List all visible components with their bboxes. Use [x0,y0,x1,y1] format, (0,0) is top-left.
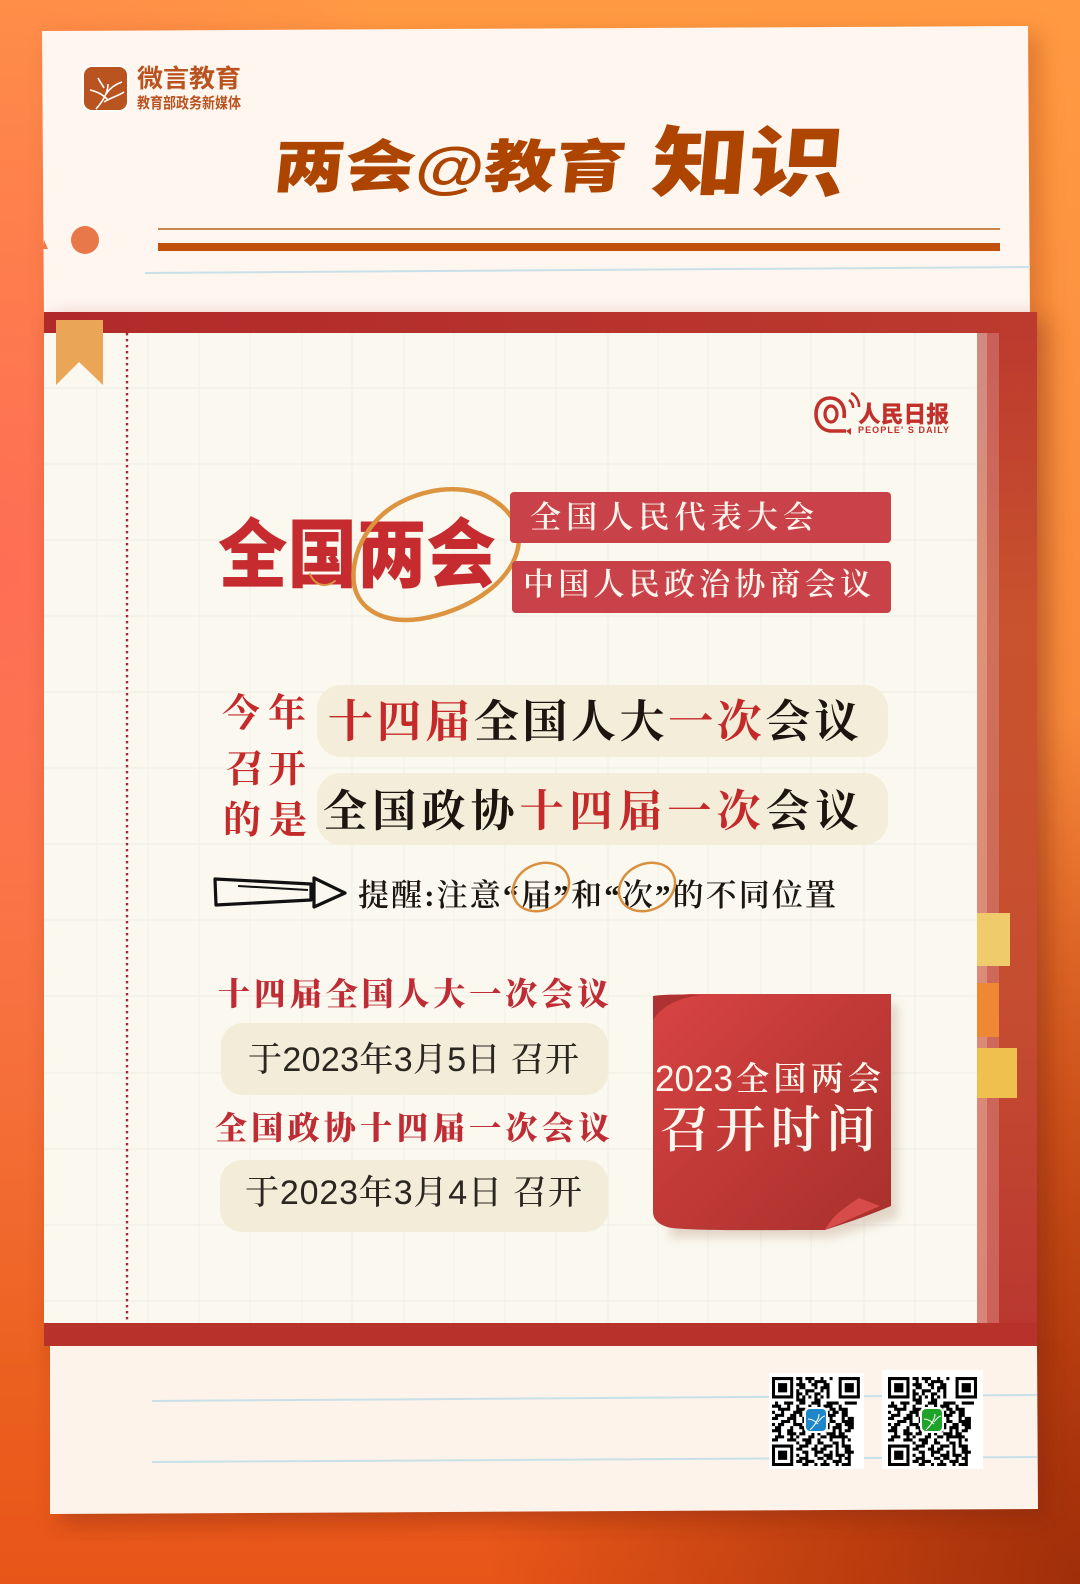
ruled line: top paper [145,267,1030,273]
icon: bookmark [56,320,103,385]
label: 今年召开的是: 召开 [226,749,306,791]
logo: 微言教育: 微言教育 [137,64,241,93]
panel: bottom paper sheet [44,1323,1047,1524]
heading: 十四届全国人大一次会议: 十四届全国人大一次会议 [218,976,609,1012]
red note: 召开时间: 全国两会 [736,1061,881,1098]
label: 今年召开的是 [222,693,307,842]
red note: 召开时间: 2023 [655,1058,733,1099]
date pill: 3月5日 [221,1023,608,1095]
pill: 全国政协十四届一次会议 [317,773,888,845]
banner: 中国人民政治协商会议: 中国人民政治协商会议 [523,567,871,602]
panel: top paper sheet [42,26,1042,330]
pill: 十四届全国人大一次会议: 十四届全国人大一次会议 [328,697,859,747]
hand-drawn circle [310,489,519,620]
icon: green badge [920,1407,944,1433]
pill: 十四届全国人大一次会议 [317,685,888,757]
logo: 微言教育 [82,64,241,112]
red note: 召开时间: 召开时间 [660,1102,876,1158]
heading: 全国政协十四届一次会议: 全国政协十四届一次会议 [215,1110,610,1146]
right tabs [977,913,1017,1098]
QR code: blue [769,1373,864,1469]
logo: 微言教育: 教育部政务新媒体 [137,94,241,112]
banner: 中国人民政治协商会议 [512,561,891,613]
hand-drawn circles on 届 and 次 [505,854,683,920]
red note: 召开时间 [653,994,898,1238]
label: 今年召开的是: 的是 [223,800,307,842]
banner: 全国人民代表大会 [510,492,891,543]
QR code: green [882,1370,983,1469]
date pill: 3月5日: 于2023年3月5日 召开 [248,1041,579,1079]
title rules and dot [43,226,1000,254]
title: 两会@教育 [271,136,629,200]
banner: 全国人民代表大会: 全国人民代表大会 [530,500,814,535]
panel: grid paper [44,333,977,1323]
reminder text: 提醒:注意“届”和“次”的不同位置 [358,878,836,913]
panel: red notebook frame [44,312,1048,1358]
title [271,121,848,207]
logo: 人民日报: PEOPLE' S DAILY [858,425,949,435]
title: 知识 [649,121,848,207]
date pill: 3月4日: 于2023年3月4日 召开 [245,1174,582,1212]
heading: 全国两会: 全国两会 [218,513,496,597]
arrow [215,878,345,907]
pill: 全国政协十四届一次会议: 全国政协十四届一次会议 [323,787,859,836]
date pill: 3月4日 [220,1160,608,1232]
logo: 人民日报: 人民日报 [858,401,949,427]
icon: blue badge [804,1407,828,1433]
label: 今年召开的是: 今年 [222,693,306,735]
ruled lines: bottom paper [152,1395,1037,1462]
logo: 人民日报 [816,393,949,435]
